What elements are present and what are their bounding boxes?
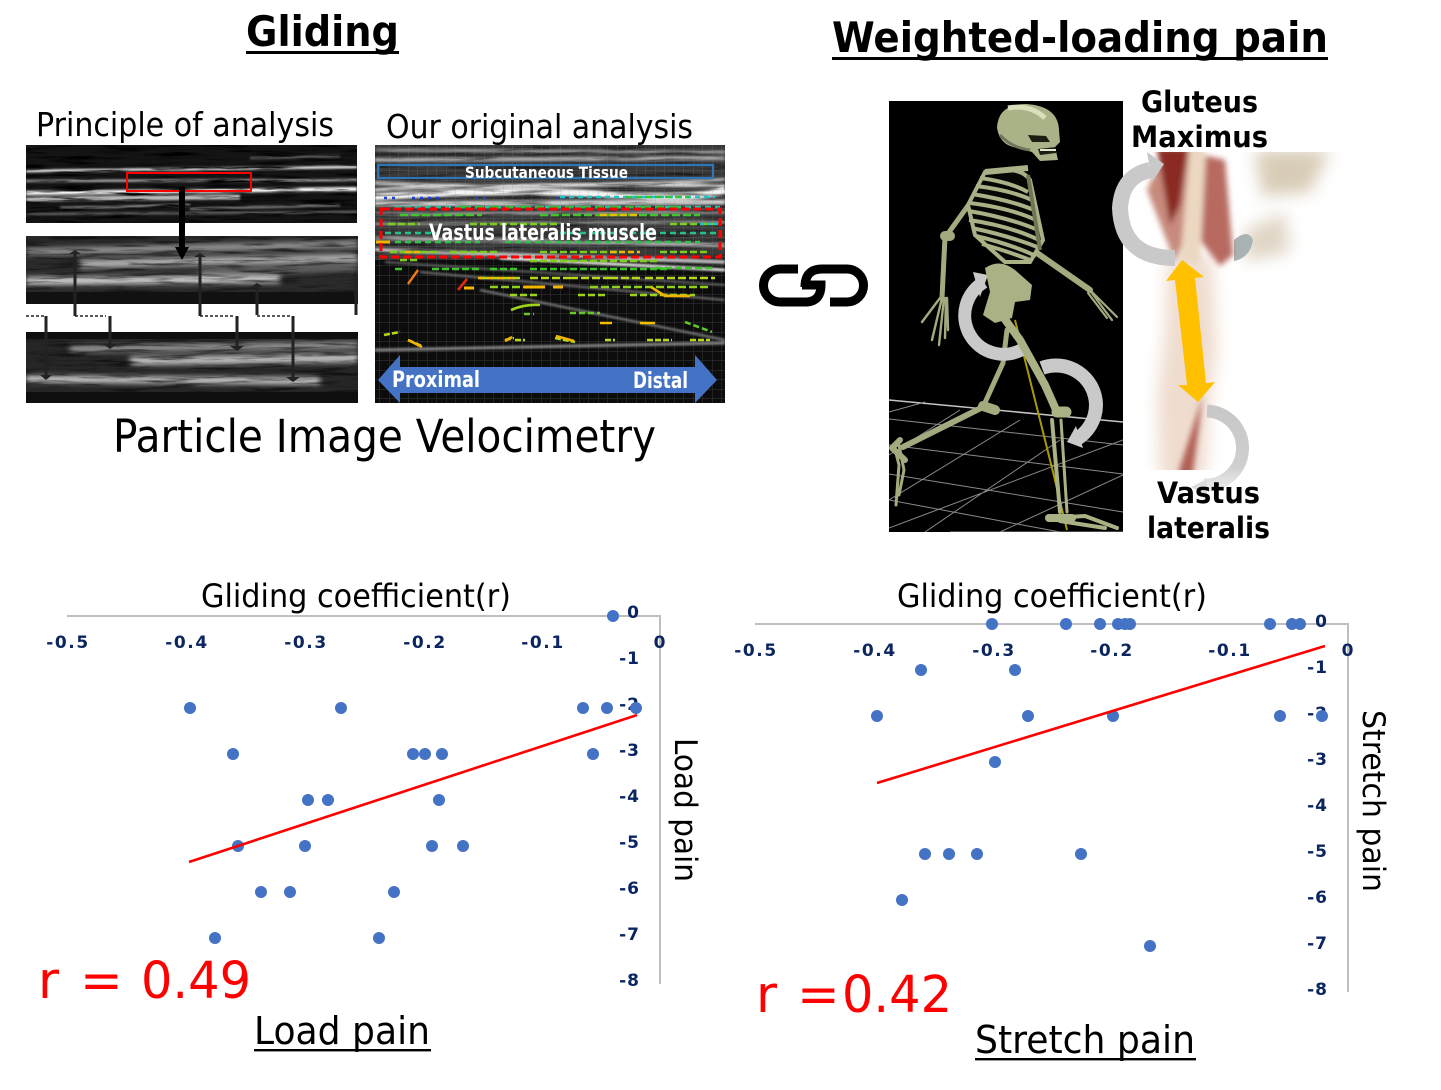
axes (67, 616, 660, 984)
x tick labels: -0.2 (403, 633, 447, 653)
gluteus arrow (1120, 152, 1175, 258)
y tick labels (1307, 612, 1328, 1000)
pelvis (983, 263, 1032, 323)
x tick labels: -0.5 (46, 633, 90, 653)
y tick labels: 0 (627, 603, 640, 623)
blue box: subcutaneous tissue (378, 165, 713, 178)
ultrasound frame: bottom (26, 332, 358, 403)
red selection box (127, 173, 251, 191)
axis title: load pain: Load pain (667, 738, 703, 882)
skull (997, 104, 1060, 161)
illustration: gluteus maximus and vastus lateralis muscles (1147, 148, 1330, 480)
y tick labels: -6 (619, 879, 640, 899)
y tick labels: -1 (619, 649, 640, 669)
x tick labels: 0 (1342, 641, 1354, 661)
icon: chain link (764, 269, 864, 302)
y tick labels: -8 (1307, 980, 1328, 1000)
y tick labels: -4 (619, 787, 640, 807)
title: Weighted-loading pain: Weighted-loading pain (832, 13, 1328, 62)
y tick labels: -1 (1307, 658, 1328, 678)
x tick labels: 0 (654, 633, 666, 653)
label: Vastus lateralis (1147, 476, 1270, 545)
x tick labels: -0.3 (972, 641, 1016, 661)
panel: principle of analysis ultrasound frames (26, 145, 358, 403)
velocity vectors (376, 197, 720, 347)
x tick labels: -0.4 (165, 633, 209, 653)
trend line (877, 646, 1325, 783)
knee motion arrow (1042, 365, 1096, 448)
x tick labels: -0.1 (1208, 641, 1252, 661)
red dashed box: vastus lateralis (381, 209, 720, 257)
label: Subcutaneous Tissue: Subcutaneous Tissue (465, 163, 628, 182)
tissue bands (375, 150, 725, 350)
y tick labels: -3 (619, 741, 640, 761)
hip cup (1234, 234, 1253, 261)
hip motion arrow (965, 272, 1023, 354)
x tick labels (734, 641, 1354, 661)
label: Vastus lateralis: Vastus (1157, 476, 1260, 510)
axes (755, 624, 1348, 992)
correlation value: = (80, 952, 123, 1011)
x tick labels: -0.1 (521, 633, 565, 653)
correlation value (756, 966, 952, 1025)
y tick labels: -4 (1307, 796, 1328, 816)
yellow muscle line (1015, 320, 1067, 530)
y tick labels: 0 (1315, 612, 1328, 632)
axis title: stretch pain: Stretch pain (1355, 710, 1391, 892)
vastus arrow (1191, 411, 1243, 496)
x tick labels: -0.2 (1090, 641, 1134, 661)
caption: Particle Image Velocimetry: Particle Image Velocimetry (113, 410, 656, 463)
axis title: gliding coefficient: Gliding coefficient(r) (201, 577, 511, 615)
label: Proximal: Proximal (392, 368, 480, 393)
label: Vastus lateralis muscle: Vastus lateralis muscle (429, 221, 657, 246)
y tick labels: -2 (1307, 704, 1328, 724)
heading: Principle of analysis: Principle of analysis (36, 105, 334, 144)
thigh soft tissue (1157, 255, 1217, 480)
label: Gluteus Maximus (1131, 85, 1268, 154)
arrows between frames (26, 254, 356, 378)
x tick labels: -0.5 (734, 641, 778, 661)
ultrasound frame: top (26, 145, 357, 223)
y tick labels: -8 (619, 971, 640, 991)
data points (184, 610, 642, 944)
arrow: proximal to distal (378, 355, 717, 403)
ultrasound frame: middle (26, 236, 358, 304)
y tick labels: -6 (1307, 888, 1328, 908)
x tick labels: -0.4 (853, 641, 897, 661)
y tick labels: -7 (1307, 934, 1328, 954)
panel: original analysis vector map (375, 145, 725, 403)
data points (871, 618, 1328, 952)
black arrow (175, 187, 189, 260)
x tick labels (46, 633, 666, 653)
y tick labels: -7 (619, 925, 640, 945)
axis title: gliding coefficient: Gliding coefficient(r) (897, 577, 1207, 615)
chart: stretch pain scatter (734, 577, 1391, 1062)
y tick labels: -5 (1307, 842, 1328, 862)
label: Vastus lateralis: lateralis (1147, 511, 1270, 545)
label: Gluteus Maximus: Maximus (1131, 120, 1268, 154)
red muscle bellies (1147, 148, 1233, 480)
label: Distal: Distal (633, 369, 688, 394)
correlation value: 0.49 (141, 952, 251, 1011)
orange double arrow (1166, 260, 1215, 402)
y tick labels (619, 603, 640, 991)
trend line (189, 715, 637, 862)
x tick labels: -0.3 (284, 633, 328, 653)
title: Gliding: Gliding (246, 7, 399, 56)
floor grid (889, 400, 1123, 532)
y tick labels: -3 (1307, 750, 1328, 770)
caption: Stretch pain: Stretch pain (975, 1018, 1195, 1062)
caption: Load pain: Load pain (254, 1009, 430, 1053)
y tick labels: -2 (619, 695, 640, 715)
correlation value: 0.42 (842, 966, 952, 1025)
measurement grid (375, 145, 725, 403)
correlation value: r (756, 966, 777, 1025)
y tick labels: -5 (619, 833, 640, 853)
label: Gluteus Maximus: Gluteus (1141, 85, 1258, 119)
correlation value: = (797, 966, 840, 1025)
heading: Our original analysis: Our original analysis (386, 107, 693, 146)
correlation value: r (38, 952, 59, 1011)
ribcage (968, 168, 1043, 262)
skeleton bones: arms and back leg (892, 175, 1117, 505)
panel: skeleton gait model (889, 101, 1123, 532)
front leg (993, 303, 1117, 528)
chart: load pain scatter (38, 577, 703, 1053)
correlation value (38, 952, 251, 1011)
pelvic bone (1245, 150, 1330, 262)
